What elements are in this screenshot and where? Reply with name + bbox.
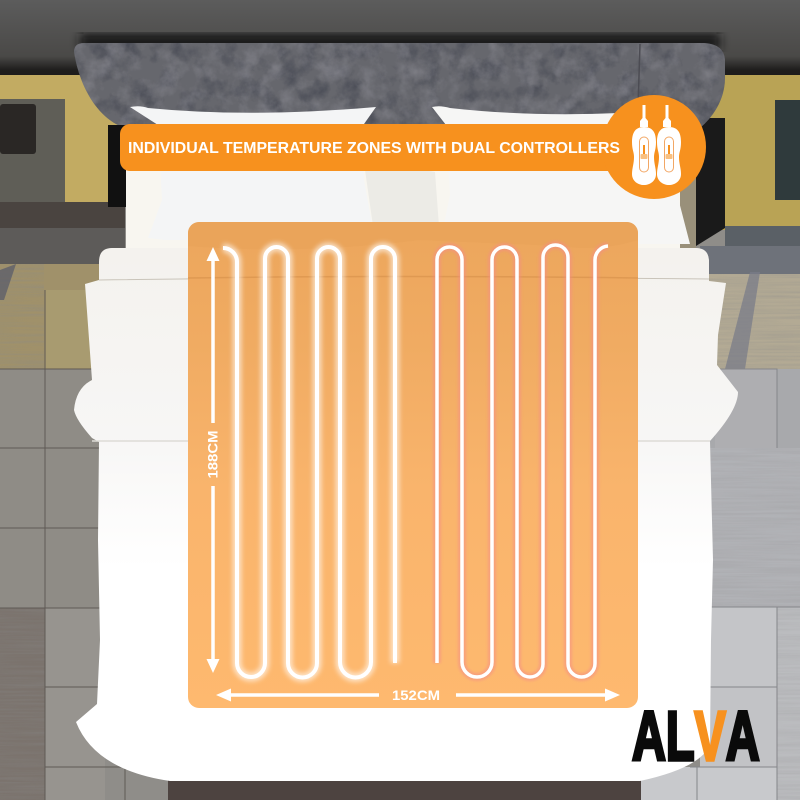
bed duvet [74,248,738,781]
mattress head and pillows [126,106,690,252]
orange heating panel [188,222,638,708]
width dimension: 152CM [216,688,620,703]
heating element: right zone (pink glow) [437,245,608,677]
height dimension: 188CM [206,247,220,673]
heating element: left zone (white glow) [223,247,395,678]
banner: temperature zones [120,95,706,199]
icon: dual controllers [632,105,681,185]
left wall panel [0,75,125,235]
left floor [0,228,125,264]
right floor [700,246,800,274]
height dimension: 188CM: 188CM [206,430,220,478]
width dimension: 152CM: 152CM [392,688,440,703]
banner heading: INDIVIDUAL TEMPERATURE ZONES WITH DUAL CONTROLLERS [128,140,620,157]
logo: ALVA: ALVA [632,697,760,775]
right wall panel [680,75,800,230]
headboard [74,43,725,207]
bench under bed [168,778,641,800]
